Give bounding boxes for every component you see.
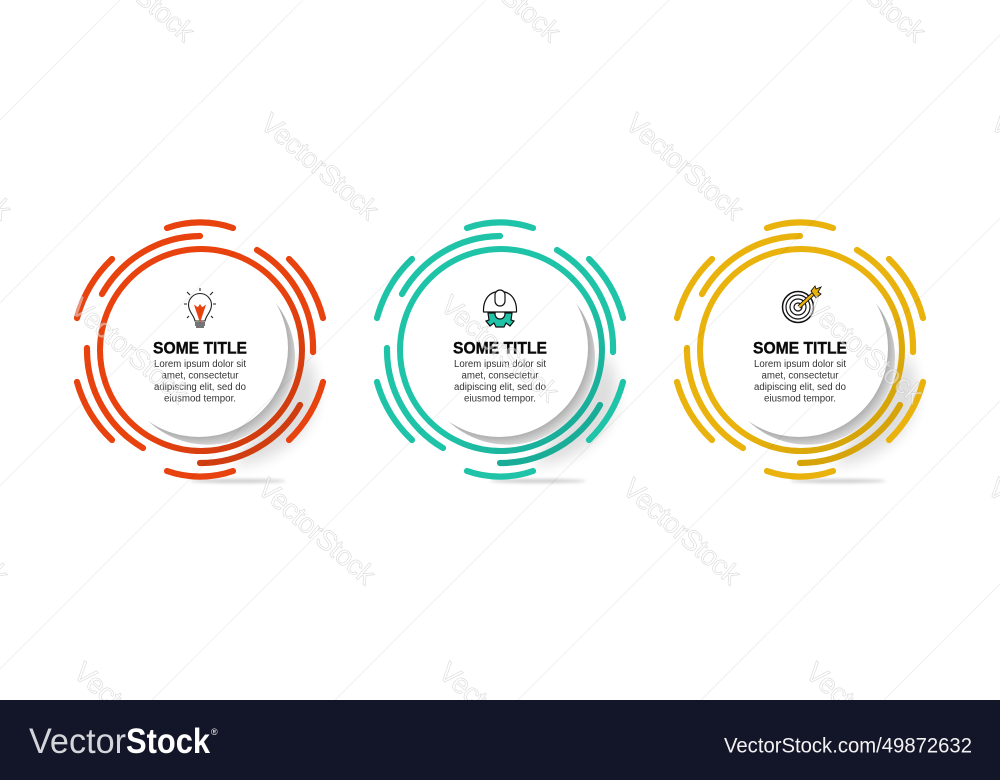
- floor shadow: red: [190, 479, 286, 483]
- body text: teal: eiusmod tempor.: [464, 394, 536, 404]
- watermark text: VectorStock: [435, 289, 565, 408]
- body text: teal: amet, consectetur: [462, 370, 539, 382]
- watermark text: VectorStock: [800, 291, 930, 410]
- crescent shadow: yellow: [740, 292, 895, 445]
- body text: red: eiusmod tempor.: [164, 394, 236, 404]
- body text: yellow: amet, consectetur: [762, 370, 839, 382]
- outer arcs: teal: [377, 222, 623, 477]
- white disc: red: [110, 259, 288, 437]
- white disc: yellow: [710, 259, 888, 437]
- watermark text: VectorStock: [617, 472, 747, 591]
- footer image id: VectorStock.com/49872632: [724, 734, 972, 758]
- footer logo: Vector: [29, 722, 126, 761]
- cast shadow: yellow: [832, 350, 917, 466]
- outer arcs: red: [77, 222, 323, 477]
- body text: teal: adipiscing elit, sed do: [454, 382, 546, 393]
- watermark text: VectorStock: [68, 656, 198, 775]
- panel: yellow circle step: [677, 222, 923, 483]
- title: red: SOME TITLE: [153, 338, 247, 358]
- watermark text: VectorStock: [433, 656, 563, 775]
- panel: red circle step: [77, 222, 323, 483]
- icon: light bulb: [184, 288, 216, 327]
- floor shadow: teal: [490, 479, 586, 483]
- body text: yellow: adipiscing elit, sed do: [754, 382, 846, 393]
- body text: yellow: Lorem ipsum dolor sit: [754, 359, 846, 370]
- body text: teal: [454, 359, 546, 404]
- title: yellow: SOME TITLE: [753, 338, 847, 358]
- watermark text: VectorStock: [255, 107, 385, 226]
- floor shadow: yellow: [790, 479, 886, 483]
- footer bar: [0, 700, 1000, 780]
- body text: yellow: [754, 359, 846, 404]
- icon: helmet with gear: [483, 290, 517, 327]
- body text: yellow: eiusmod tempor.: [764, 394, 836, 404]
- inner ring: yellow: [700, 249, 902, 451]
- outer arcs: yellow: [677, 222, 923, 477]
- body text: red: [154, 359, 246, 404]
- body text: red: adipiscing elit, sed do: [154, 382, 246, 393]
- watermark text: VectorStock: [252, 472, 382, 591]
- footer logo: [29, 722, 218, 761]
- footer logo: Stock: [126, 722, 210, 761]
- footer logo: ®: [211, 727, 218, 737]
- inner ring: red: [100, 249, 302, 451]
- panel: teal circle step: [377, 222, 623, 483]
- crescent shadow: teal: [440, 292, 595, 445]
- white disc: teal: [410, 259, 588, 437]
- cast shadow: red: [232, 350, 317, 466]
- watermark text: VectorStock: [620, 107, 750, 226]
- inner ring: teal: [400, 249, 602, 451]
- crescent shadow: red: [140, 292, 295, 445]
- icon: target with arrow: [782, 286, 821, 322]
- cast shadow: teal: [532, 350, 617, 466]
- watermark text: VectorStock: [65, 291, 195, 410]
- body text: red: Lorem ipsum dolor sit: [154, 359, 246, 370]
- body text: red: amet, consectetur: [162, 370, 239, 382]
- watermark text: VectorStock: [800, 656, 930, 775]
- title: teal: SOME TITLE: [453, 338, 547, 358]
- body text: teal: Lorem ipsum dolor sit: [454, 359, 546, 370]
